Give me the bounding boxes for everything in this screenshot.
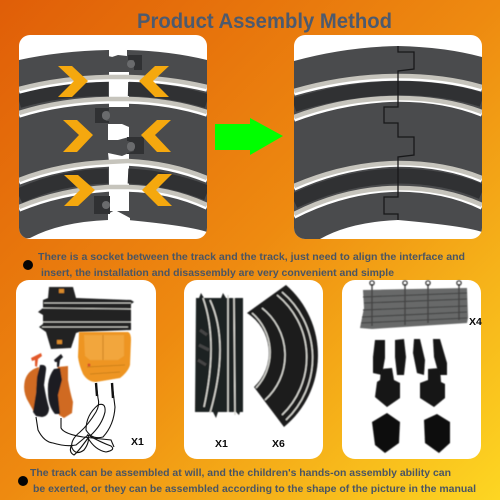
label X1: X1 — [215, 438, 228, 450]
text: assembly description: be exerted, or they can be assembled according to the shape of the picture in the manual — [33, 484, 476, 495]
arrow: green — [215, 118, 283, 155]
socket gaps — [108, 50, 130, 220]
track body right — [294, 46, 482, 239]
straight crossover track — [195, 293, 243, 418]
rails — [19, 77, 207, 209]
socket details — [94, 55, 144, 214]
panel: supports and connectors — [342, 280, 482, 459]
title: Product Assembly Method — [137, 10, 392, 33]
bullet 1 — [23, 260, 33, 270]
text: assembly description — [30, 468, 476, 495]
panel: track pieces — [184, 280, 323, 459]
text: socket description — [38, 252, 465, 279]
text: socket description: insert, the installation and disassembly are very convenient and simple — [41, 268, 394, 279]
lower pedestals — [372, 413, 450, 453]
chevrons — [58, 66, 172, 206]
curved track — [247, 285, 318, 427]
label X1: X1 — [131, 436, 144, 448]
label X6: X6 — [272, 438, 285, 450]
text: assembly description: The track can be assembled at will, and the children's hands-on assembly ability can — [30, 468, 451, 479]
upper pedestals — [375, 368, 445, 407]
stacked supports — [360, 281, 468, 329]
track body left — [19, 50, 207, 239]
connector pieces — [373, 339, 447, 375]
power track — [38, 287, 134, 349]
label X4: X4 — [469, 316, 482, 328]
bullet 2 — [18, 476, 28, 486]
interlocking seam — [384, 46, 414, 220]
rails right — [294, 76, 482, 216]
tabs — [106, 56, 134, 153]
text: socket description: There is a socket between the track and the track, just need to align the interface and — [38, 252, 465, 263]
controller 2 — [48, 354, 73, 418]
grooves — [19, 89, 207, 101]
orange transformer — [78, 332, 131, 382]
grooves right — [294, 88, 482, 105]
panel: assembled tracks — [294, 35, 482, 239]
panel: power base and controllers — [16, 280, 156, 459]
wires — [36, 383, 115, 455]
controller 1 — [24, 353, 49, 417]
panel: separated tracks with socket gaps — [19, 35, 207, 240]
